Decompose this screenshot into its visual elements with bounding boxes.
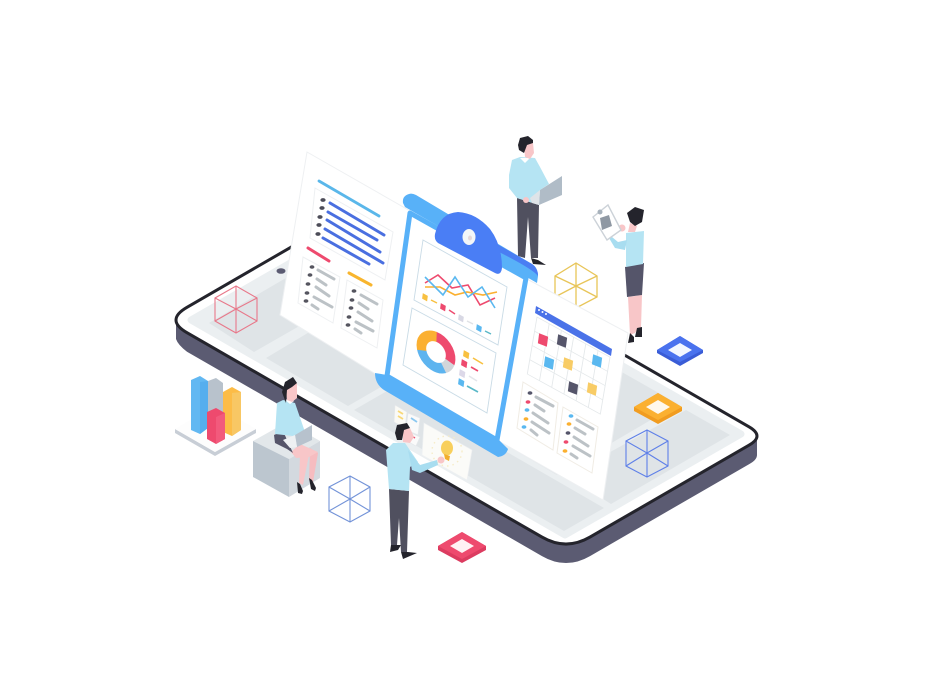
laptop — [283, 425, 312, 448]
shirt — [509, 157, 549, 205]
heading bar — [319, 181, 379, 216]
calendar header — [535, 306, 612, 356]
arm — [609, 237, 627, 250]
icon: blue wireframe cube on floor — [329, 476, 370, 522]
person: woman with clipboard — [593, 205, 644, 343]
legs — [517, 198, 539, 258]
person: man touching screen — [386, 423, 444, 559]
clipboard top bar — [403, 194, 538, 283]
calendar day markers — [538, 333, 602, 396]
list card one — [298, 257, 340, 323]
list card right — [557, 407, 598, 473]
panel: clipboard — [375, 194, 538, 457]
chart legend — [422, 293, 491, 334]
laptop — [530, 176, 562, 205]
list card two — [341, 280, 383, 348]
list card left — [517, 382, 558, 450]
head — [282, 377, 297, 403]
thigh — [291, 444, 318, 458]
donut legend — [458, 350, 483, 392]
icon: red wireframe cube — [215, 286, 257, 333]
shoe — [531, 258, 546, 265]
phone body — [176, 205, 757, 563]
donut chart — [413, 322, 459, 382]
icon: light bulb — [441, 440, 453, 461]
icon: yellow diamond tile — [634, 393, 682, 424]
idea card with light bulb — [422, 423, 472, 480]
mini clipboard — [593, 205, 621, 240]
panel: right calendar document — [497, 278, 628, 500]
skirt — [274, 431, 293, 453]
legs — [628, 295, 642, 335]
red label bar — [308, 248, 329, 261]
torso — [626, 231, 644, 267]
small sticky notes — [394, 405, 420, 446]
collar — [285, 398, 294, 404]
shirt — [386, 443, 418, 491]
shoes — [390, 545, 417, 559]
collar — [520, 158, 530, 163]
seat box — [253, 422, 320, 497]
icon: red diamond tile — [438, 532, 486, 563]
person: man with laptop — [509, 136, 562, 265]
hand — [523, 197, 529, 203]
far lower leg — [309, 448, 318, 482]
legs — [389, 489, 409, 552]
torso — [275, 400, 305, 436]
hand — [618, 224, 626, 232]
clipboard paper and frame — [387, 213, 526, 440]
calendar grid — [527, 317, 610, 414]
head — [518, 136, 534, 159]
head — [627, 207, 644, 232]
icon: blue diamond tile — [657, 336, 703, 366]
skirt — [625, 263, 644, 297]
clipboard top bar shade — [497, 244, 538, 276]
near lower leg — [299, 455, 309, 485]
shoes — [628, 327, 642, 343]
panel: left document — [280, 152, 412, 381]
yellow label bar — [349, 273, 371, 285]
hand — [438, 456, 444, 464]
head — [395, 423, 414, 443]
icon: blue wireframe cube on screen — [626, 430, 668, 477]
person: seated woman with laptop — [253, 377, 320, 497]
icon: yellow wireframe cube — [555, 263, 597, 308]
donut chart card — [403, 308, 496, 413]
shoes — [297, 478, 316, 494]
text card with blue lines — [310, 188, 393, 280]
clipboard bottom bar — [375, 373, 508, 457]
icon: bar chart on tray — [175, 376, 256, 456]
arm — [408, 450, 438, 473]
clipboard clip — [435, 212, 502, 274]
line chart card — [414, 240, 507, 345]
